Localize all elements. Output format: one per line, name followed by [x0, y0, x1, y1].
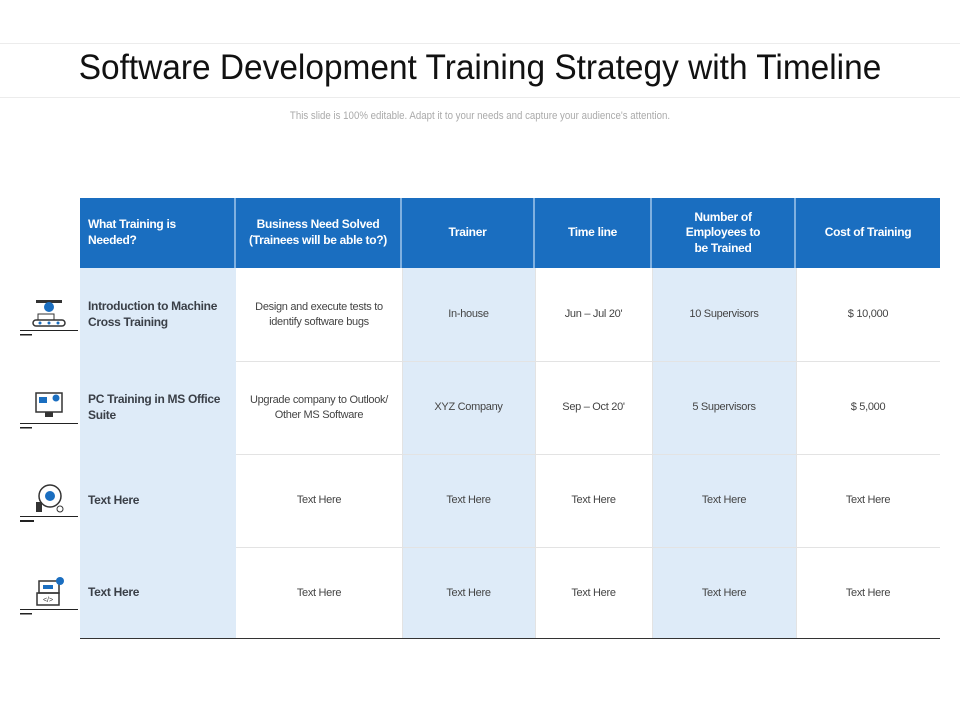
- row 2: $ 5,000: [851, 401, 885, 413]
- icon: update: [20, 484, 78, 522]
- row 3: Text Here: [702, 494, 746, 506]
- icon: code: [20, 577, 78, 614]
- row 1: Introduction to Machine Cross Training: [88, 299, 217, 328]
- row 3: Text Here: [846, 494, 890, 506]
- header row: Trainer: [449, 225, 486, 239]
- row 2: PC Training in MS Office Suite: [88, 392, 220, 422]
- row 1: 10 Supervisors: [689, 308, 759, 320]
- title: Software Development Training Strategy with Timeline: [79, 48, 881, 87]
- row 3: [88, 493, 890, 507]
- row 2: Sep – Oct 20': [562, 401, 625, 413]
- row 3: Text Here: [446, 494, 491, 506]
- row 4: Text Here: [702, 587, 746, 599]
- row 1: Jun – Jul 20': [565, 308, 622, 320]
- subtitle: This slide is 100% editable. Adapt it to your needs and capture your audience's attention.: [290, 110, 670, 122]
- table: [80, 268, 796, 638]
- header row: Business Need Solved (Trainees will be able to?): [249, 217, 387, 247]
- header row: Cost of Training: [825, 225, 911, 239]
- row 2: XYZ Company: [434, 401, 503, 413]
- row 1: In-house: [448, 308, 489, 320]
- row 2: 5 Supervisors: [692, 401, 756, 413]
- icon: code: </>: [43, 597, 53, 604]
- row 4: Text Here: [297, 587, 341, 599]
- row 4: Text Here: [846, 587, 890, 599]
- header row: [80, 198, 940, 268]
- column backgrounds: [80, 268, 236, 639]
- row 1: Design and execute tests to identify software bugs: [255, 301, 383, 328]
- row 4: [88, 585, 890, 599]
- row 2: [88, 392, 886, 422]
- row 4: Text Here: [88, 585, 139, 599]
- row 2: Upgrade company to Outlook/ Other MS Software: [250, 394, 388, 420]
- header row: Number of Employees to be Trained: [686, 210, 760, 255]
- row 4: Text Here: [446, 587, 491, 599]
- row 4: Text Here: [571, 587, 616, 599]
- row 3: Text Here: [571, 494, 616, 506]
- row 3: Text Here: [88, 493, 139, 507]
- row 1: [88, 299, 888, 328]
- header row: Time line: [568, 225, 617, 239]
- row 1: $ 10,000: [848, 308, 888, 320]
- icon: computer training: [20, 392, 78, 428]
- row 3: Text Here: [297, 494, 341, 506]
- icon: machine: [20, 300, 78, 336]
- header row: What Training is Needed?: [88, 217, 176, 247]
